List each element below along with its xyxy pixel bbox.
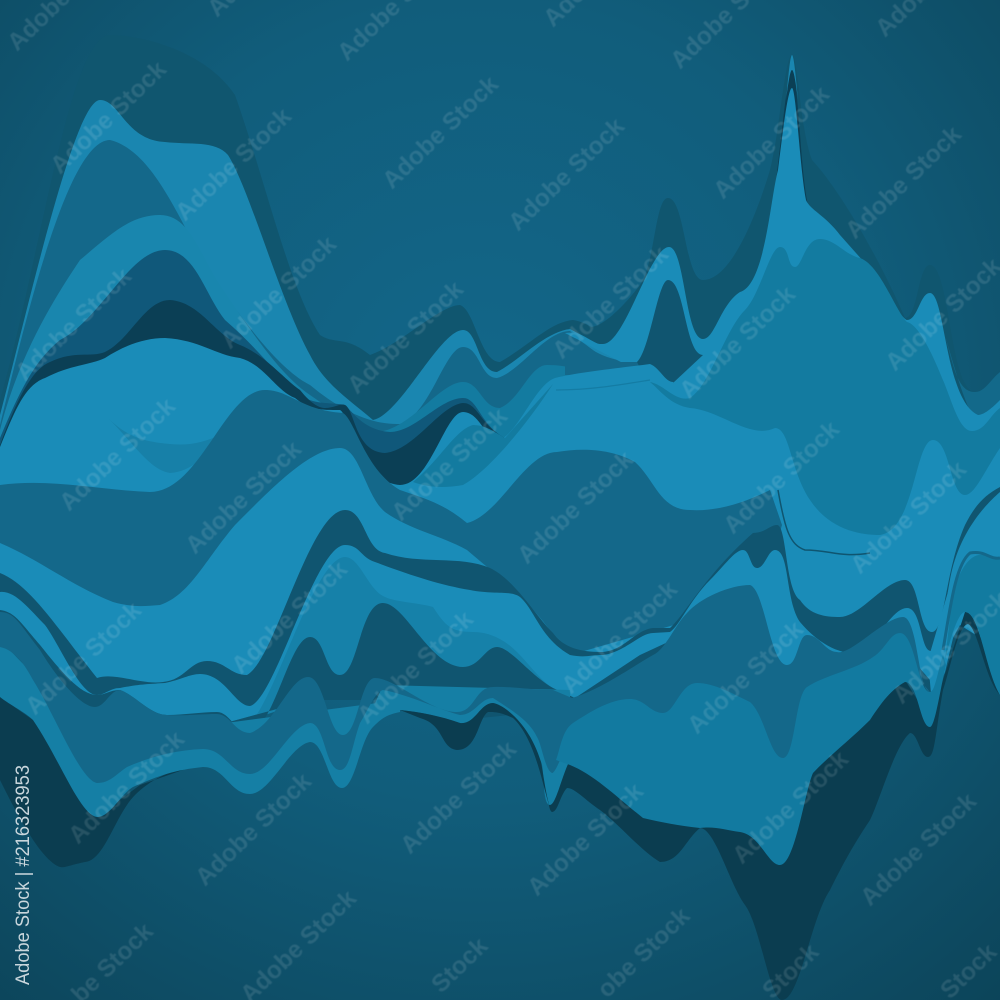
wave: far-right outline [943,552,1000,650]
wave: small dark peak [637,280,703,383]
watermark pattern: Adobe Stock [170,103,297,226]
wave: dark ridge layer [0,250,505,620]
wave: spire tip [786,55,798,100]
watermark pattern: Adobe Stock [45,56,172,179]
wave: light upper-left layer [0,100,700,620]
watermark pattern: Adobe Stock [386,403,513,526]
wave: main light band [0,338,1000,760]
wave: lower-right medium-light lobe [556,633,946,865]
wave: darkest lower-left mass [0,697,197,867]
watermark pattern: Adobe Stock [503,113,630,236]
wave: central medium-light lobe [413,384,553,487]
watermark pattern: Adobe Stock [215,231,342,354]
wave: light mid layer [0,215,700,620]
watermark pattern: Adobe Stock [512,446,639,569]
watermark pattern: Adobe Stock [522,778,649,901]
watermark pattern: Adobe Stock [395,736,522,859]
wave: thin light strip center [370,685,570,805]
watermark pattern: Adobe Stock [180,436,307,559]
wave: dark blob and tail under center [400,703,551,810]
wave: right medium ribbon [945,335,1000,420]
wave: far-right medium-light mass [945,555,1000,695]
watermark pattern: Adobe Stock [190,768,317,891]
wave: medium-light fill under ribbon [250,557,560,723]
wave: lower dark ribbon [0,487,1000,760]
wave: small left lobe [108,418,220,473]
wave: dark back layer [0,35,1000,620]
watermark pattern: Adobe Stock [377,71,504,194]
wave: lower light band [0,448,560,760]
wave: light spire layer [565,88,1000,600]
watermark pattern: Adobe Stock [845,456,972,579]
wave: dark lower band [0,603,668,760]
watermark pattern: Adobe Stock [840,121,967,244]
wave: darkest ridge and bowl [0,300,505,620]
sidebar credit text: Adobe Stock | #216323953 [13,765,34,985]
watermark pattern: Adobe Stock [556,576,683,699]
watermark pattern: Adobe Stock [674,281,801,404]
wave: thin light lower band left [0,640,400,817]
wave: central medium band [0,390,782,660]
watermark pattern: Adobe Stock [547,241,674,364]
watermark pattern: Adobe Stock [20,597,147,720]
watermark pattern: Stock [426,932,493,998]
wave: medium lower band [0,585,930,785]
wave: thin dark line in the central light band [556,380,650,390]
watermark pattern: Adobe Stock [54,393,181,516]
watermark pattern: Adobe Stock [682,616,809,739]
wave: darkest lower-right mass [548,612,1000,1000]
wave: medium fill below the light ribbon [565,336,640,375]
watermark pattern: Adobe Stock [718,416,845,539]
wave: large right medium-light mass [650,239,1000,535]
watermark pattern: Adobe Stock [708,81,835,204]
watermark pattern: Adobe Stock [226,556,353,679]
wave: lower light ribbon [0,492,1000,760]
watermark pattern: Adobe Stock [63,726,190,849]
wave: light patch beside the right tongue [928,585,962,705]
wave: spire dark core [760,70,808,275]
wave: thin dark line on the right light band [778,490,870,555]
watermark pattern: Adobe Stock [855,788,982,911]
watermark pattern: Adobe Stock [727,746,854,869]
watermark pattern: Adobe Stock [342,276,469,399]
watermark pattern: Adobe Stock [352,606,479,729]
wave: medium upper-left layer [0,140,700,620]
watermark pattern: Adobe Stock [10,263,137,386]
